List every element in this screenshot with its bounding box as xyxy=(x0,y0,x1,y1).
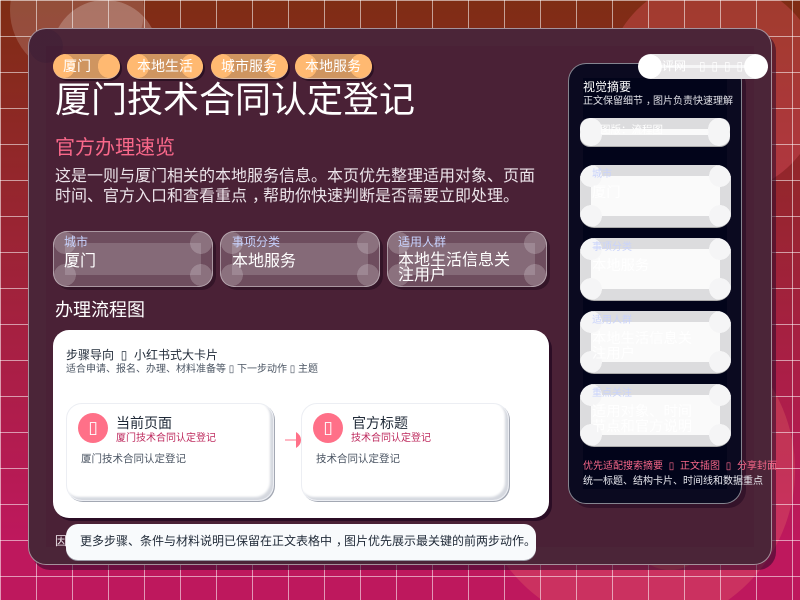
sidebar card: focus: 重点关注 xyxy=(592,388,632,399)
subtitle: 官方办理速览 xyxy=(55,137,175,159)
metric card: audience: 适用人群 xyxy=(398,235,446,249)
step icon xyxy=(78,413,108,443)
step subtitle: 厦门技术合同认定登记 xyxy=(116,433,216,444)
source pill: ▯ xyxy=(699,59,706,73)
sidebar: visual summary xyxy=(568,63,742,504)
footnote text behind callout: 因 xyxy=(55,534,67,548)
sidebar card: city xyxy=(580,165,731,228)
tag: 厦门 xyxy=(53,54,120,79)
step title: 当前页面 xyxy=(116,415,172,431)
sidebar heading: 视觉摘要 xyxy=(583,80,631,94)
tag: 城市服务: 城市服务 xyxy=(221,58,277,74)
source pill: ▯ xyxy=(749,59,756,73)
step title: 官方标题 xyxy=(352,415,408,431)
sidebar card: audience: 本地生活信息关注用户 xyxy=(592,331,692,362)
tag: 城市服务 xyxy=(211,54,288,79)
metric card: audience: 本地生活信息关注用户 xyxy=(398,252,510,284)
step body: 技术合同认定登记 xyxy=(316,453,400,465)
callout: 更多步骤、条件与材料说明已保留在正文表格中 ，图片优先展示最关键的前两步动作。 xyxy=(80,534,536,548)
tag: 本地生活 xyxy=(127,54,203,79)
sidebar note: summary: 统一标题、结构卡片、时间线和数据重点 xyxy=(583,476,763,487)
source pill: ▯ xyxy=(711,59,718,73)
flow description: 适合申请、报名、办理、材料准备等 下一步动作 主题 xyxy=(66,364,318,375)
title: 厦门技术合同认定登记 xyxy=(55,79,415,120)
arrow between steps xyxy=(285,432,301,448)
metric card: city: 厦门 xyxy=(64,253,96,270)
intro paragraph: 这是一则与厦门相关的本地服务信息。本页优先整理适用对象、页面 xyxy=(55,168,535,185)
sidebar description: 正文保留细节 ，图片负责快速理解 xyxy=(583,96,733,107)
metric card: category xyxy=(220,231,380,287)
metric card: category: 事项分类 xyxy=(232,235,280,249)
sidebar card: category: 本地服务 xyxy=(592,258,649,274)
flow description: ▯ xyxy=(229,364,234,375)
sidebar card: audience xyxy=(580,311,731,374)
step body: 厦门技术合同认定登记 xyxy=(81,453,186,465)
flow description: ▯ xyxy=(290,364,295,375)
intro paragraph: 时间、官方入口和查看重点 ，帮助你快速判断是否需要立即处理。 xyxy=(55,188,519,204)
sidebar card: category xyxy=(580,238,731,301)
source pill: ▯ xyxy=(736,59,743,73)
sidebar card: city: 城市 xyxy=(592,169,612,180)
sidebar note: usage: 优先适配搜索摘要 正文插图 分享封面 xyxy=(583,461,777,472)
sidebar pill: layout xyxy=(580,118,730,147)
flow heading: 步骤导向 小红书式大卡片 xyxy=(66,348,218,362)
metric card: city: 城市 xyxy=(64,235,88,249)
source pill xyxy=(638,54,768,79)
sidebar card: focus xyxy=(580,384,731,447)
tag: 本地服务: 本地服务 xyxy=(305,58,361,74)
section heading: 办理流程图 xyxy=(55,300,145,320)
metric card: audience xyxy=(387,231,547,287)
step subtitle: 技术合同认定登记 xyxy=(351,433,431,444)
sidebar note: usage: ▯ xyxy=(726,461,731,472)
sidebar card: category: 事项分类 xyxy=(592,242,632,253)
tag: 厦门: 厦门 xyxy=(63,58,91,74)
step icon: ▯ xyxy=(88,418,98,438)
step card: current page xyxy=(66,403,274,501)
sidebar card: focus: 适用对象、时间节点和官方说明 xyxy=(592,404,692,435)
source pill: ▯ xyxy=(724,59,731,73)
metric card: city xyxy=(53,231,213,287)
tag: 本地服务 xyxy=(295,54,372,79)
sidebar card: audience: 适用人群 xyxy=(592,315,632,326)
flow heading: ▯ xyxy=(121,348,127,362)
sidebar card: city: 厦门 xyxy=(592,185,621,201)
intro paragraph xyxy=(55,167,535,204)
step icon xyxy=(313,413,343,443)
callout xyxy=(66,524,536,560)
sidebar note: usage: ▯ xyxy=(669,461,674,472)
tag: 本地生活: 本地生活 xyxy=(137,58,193,74)
metric card: category: 本地服务 xyxy=(232,253,296,270)
step icon: ▯ xyxy=(323,418,333,438)
sidebar pill: layout: 图版：流程图 xyxy=(600,124,663,136)
flow chart panel xyxy=(53,330,549,518)
step card: official title xyxy=(301,403,509,501)
